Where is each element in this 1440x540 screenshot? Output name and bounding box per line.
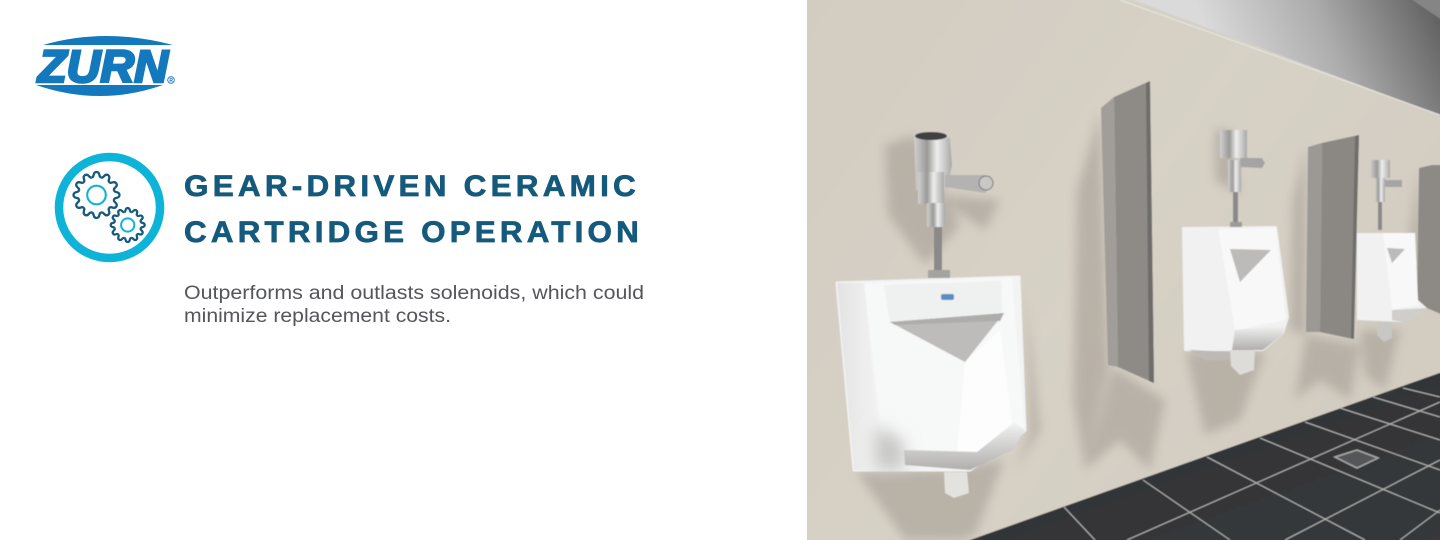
white background panel [0, 0, 807, 540]
floor [956, 371, 1440, 540]
icon: gears in circle [59, 157, 160, 258]
partition 3 [1417, 165, 1440, 316]
heading: CARTRIDGE OPERATION [184, 216, 643, 249]
wall shadows [857, 112, 1425, 540]
heading [184, 170, 643, 249]
photo: restroom with urinals [800, 0, 1440, 540]
logo: Zurn: ZURN [36, 41, 170, 92]
partition 2 [1306, 135, 1359, 339]
urinal 1 [837, 277, 1025, 498]
heading: GEAR-DRIVEN CERAMIC [184, 170, 640, 203]
wall [800, 0, 1440, 540]
urinal 3 [1357, 233, 1427, 342]
partition 1 [1101, 81, 1154, 383]
logo: Zurn: R [169, 78, 173, 84]
ceiling [1120, 0, 1440, 117]
body text: Outperforms and outlasts solenoids, which could [184, 283, 644, 304]
flush valve 3 [1370, 160, 1402, 230]
flush valve 1 [914, 132, 993, 278]
body text: minimize replacement costs. [184, 306, 451, 327]
urinal 2 [1183, 227, 1288, 375]
flush valve 2 [1220, 130, 1265, 227]
body text [184, 283, 644, 327]
